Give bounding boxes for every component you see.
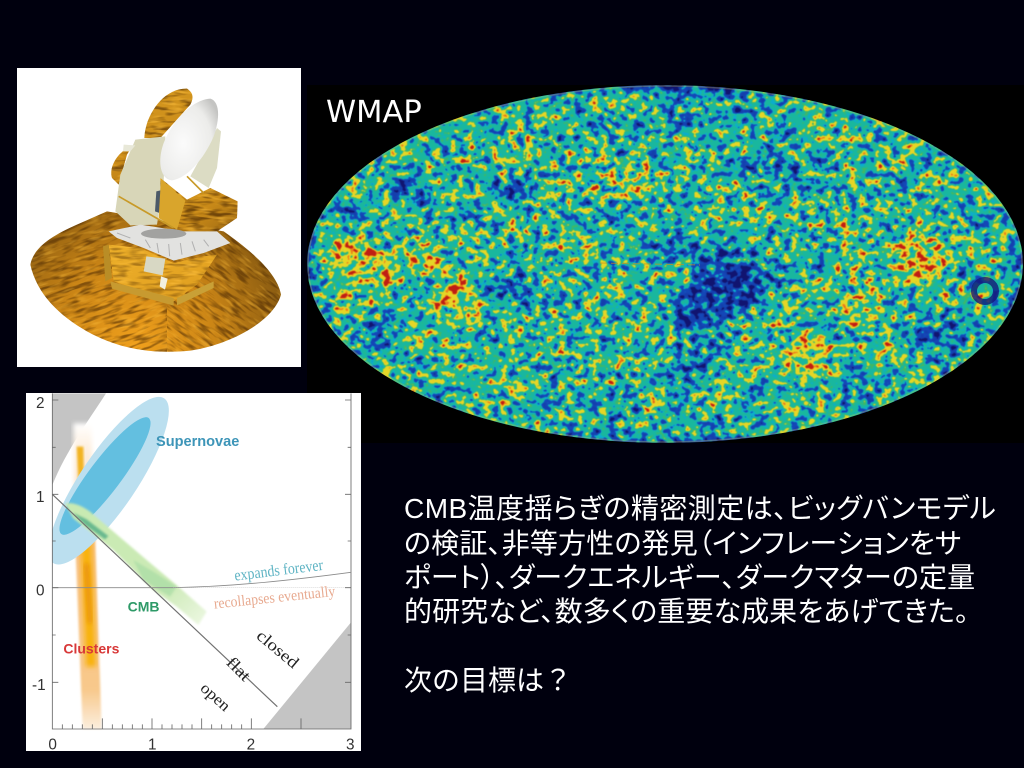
series labels: Clusters xyxy=(63,641,120,657)
axis labels: 1 xyxy=(148,736,157,753)
rear gold dish xyxy=(111,88,192,184)
CMB band xyxy=(65,503,207,625)
axis labels: 1 xyxy=(36,489,45,506)
silver collar xyxy=(109,225,230,261)
panel: WMAP spacecraft illustration xyxy=(17,68,301,367)
chart: cosmological parameter constraints xyxy=(26,393,361,753)
plot background xyxy=(26,393,361,751)
series labels: Supernovae xyxy=(156,434,239,450)
axis labels: 3 xyxy=(346,736,355,753)
bus base struts xyxy=(103,245,112,281)
text block: CMB results and next goal: 次の目標は？ xyxy=(404,665,572,696)
axes and model lines xyxy=(52,393,351,729)
text block: CMB results and next goal xyxy=(404,493,996,696)
curve annotations: open xyxy=(197,680,233,715)
curve annotations: flat xyxy=(223,653,255,685)
axis labels: -1 xyxy=(32,677,46,694)
axis labels: 2 xyxy=(247,736,255,753)
gold support structure xyxy=(160,178,238,232)
text block: CMB results and next goal: の検証、非等方性の発見（インフレーションをサ xyxy=(404,528,962,559)
axis labels: 0 xyxy=(48,736,57,753)
gold cone xyxy=(159,179,185,230)
curve annotations: recollapses eventually xyxy=(213,583,336,613)
axis labels xyxy=(32,395,355,753)
cream panels xyxy=(115,136,165,225)
supernovae ellipses xyxy=(52,396,169,564)
shield xyxy=(30,211,281,352)
axis labels: 2 xyxy=(36,395,45,412)
panel: WMAP CMB sky map xyxy=(307,85,1024,443)
heading: WMAP label: WMAP xyxy=(326,95,422,130)
series labels xyxy=(63,434,239,657)
text block: CMB results and next goal: 的研究など、数多くの重要な成果をあげてきた。 xyxy=(404,596,969,627)
curve annotations: closed xyxy=(253,626,303,673)
curve annotations xyxy=(197,557,336,715)
text block: CMB results and next goal: CMB温度揺らぎの精密測定は、ビッグバンモデル xyxy=(404,493,996,524)
text block: CMB results and next goal: ポート）、ダークエネルギー、ダークマターの定量 xyxy=(404,562,975,593)
series labels: CMB xyxy=(128,598,160,614)
primary reflector dish xyxy=(160,99,218,180)
gold bus xyxy=(108,244,217,302)
clusters bands xyxy=(73,423,102,729)
radiator window xyxy=(144,256,165,275)
excluded regions xyxy=(52,393,351,729)
axis labels: 0 xyxy=(36,582,45,599)
curve annotations: expands forever xyxy=(233,557,325,585)
